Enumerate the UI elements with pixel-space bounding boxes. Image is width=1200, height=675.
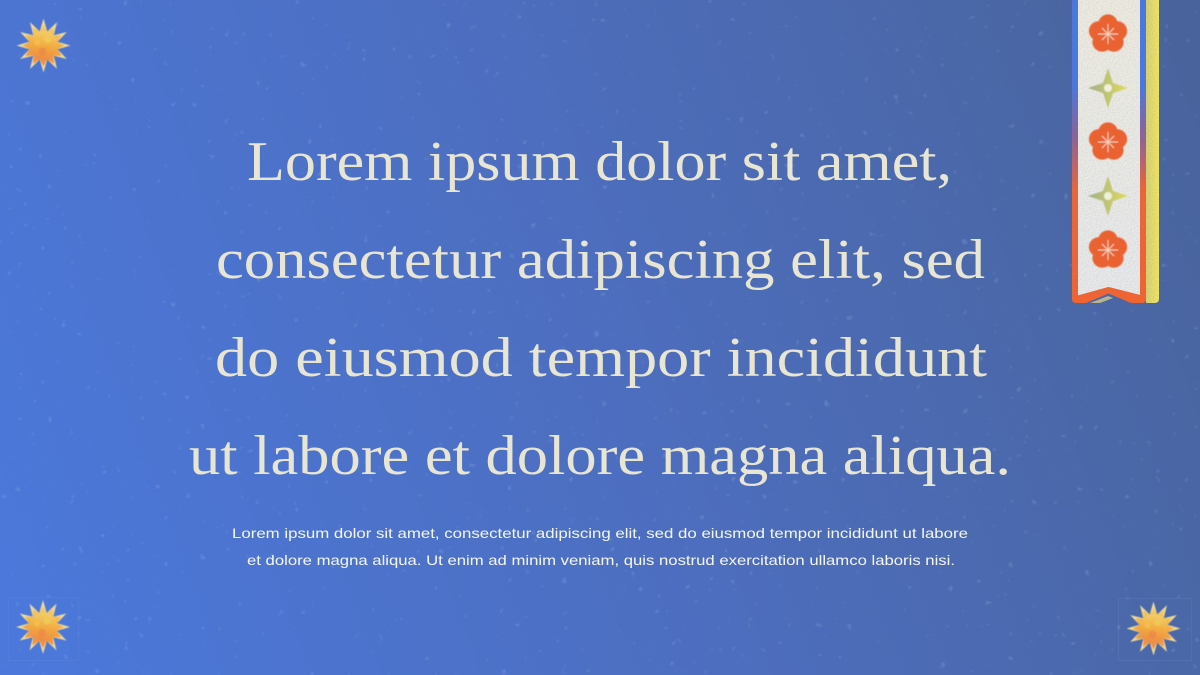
- title: do eiusmod tempor incididunt: [215, 327, 987, 389]
- body text: [232, 525, 968, 568]
- ribbon notch fold: [1090, 296, 1113, 303]
- icon: flower 2: [1089, 122, 1127, 160]
- icon: flower 3: [1089, 230, 1127, 268]
- ribbon yellow side: [1146, 0, 1159, 303]
- bookmark ribbon: [1072, 0, 1159, 303]
- icon: sun bottom right with faint frame: [1118, 598, 1192, 660]
- body text: et dolore magna aliqua. Ut enim ad minim veniam, quis nostrud exercitation ullamco laboris nisi.: [247, 552, 955, 568]
- icon: sparkle 1: [1088, 68, 1128, 108]
- ribbon edge: [1072, 0, 1146, 303]
- icon: flower 1: [1089, 14, 1127, 52]
- title: ut labore et dolore magna aliqua.: [189, 425, 1011, 487]
- body text: Lorem ipsum dolor sit amet, consectetur adipiscing elit, sed do eiusmod tempor incididunt ut labore: [232, 525, 968, 541]
- icon: sparkle 2: [1088, 176, 1128, 216]
- ribbon paper: [1078, 0, 1140, 296]
- icon: sun bottom left with faint frame: [8, 598, 78, 660]
- title: consectetur adipiscing elit, sed: [216, 229, 985, 291]
- icon: sun top left: [16, 18, 70, 72]
- title: Lorem ipsum dolor sit amet,: [247, 131, 952, 193]
- title: [189, 131, 1011, 487]
